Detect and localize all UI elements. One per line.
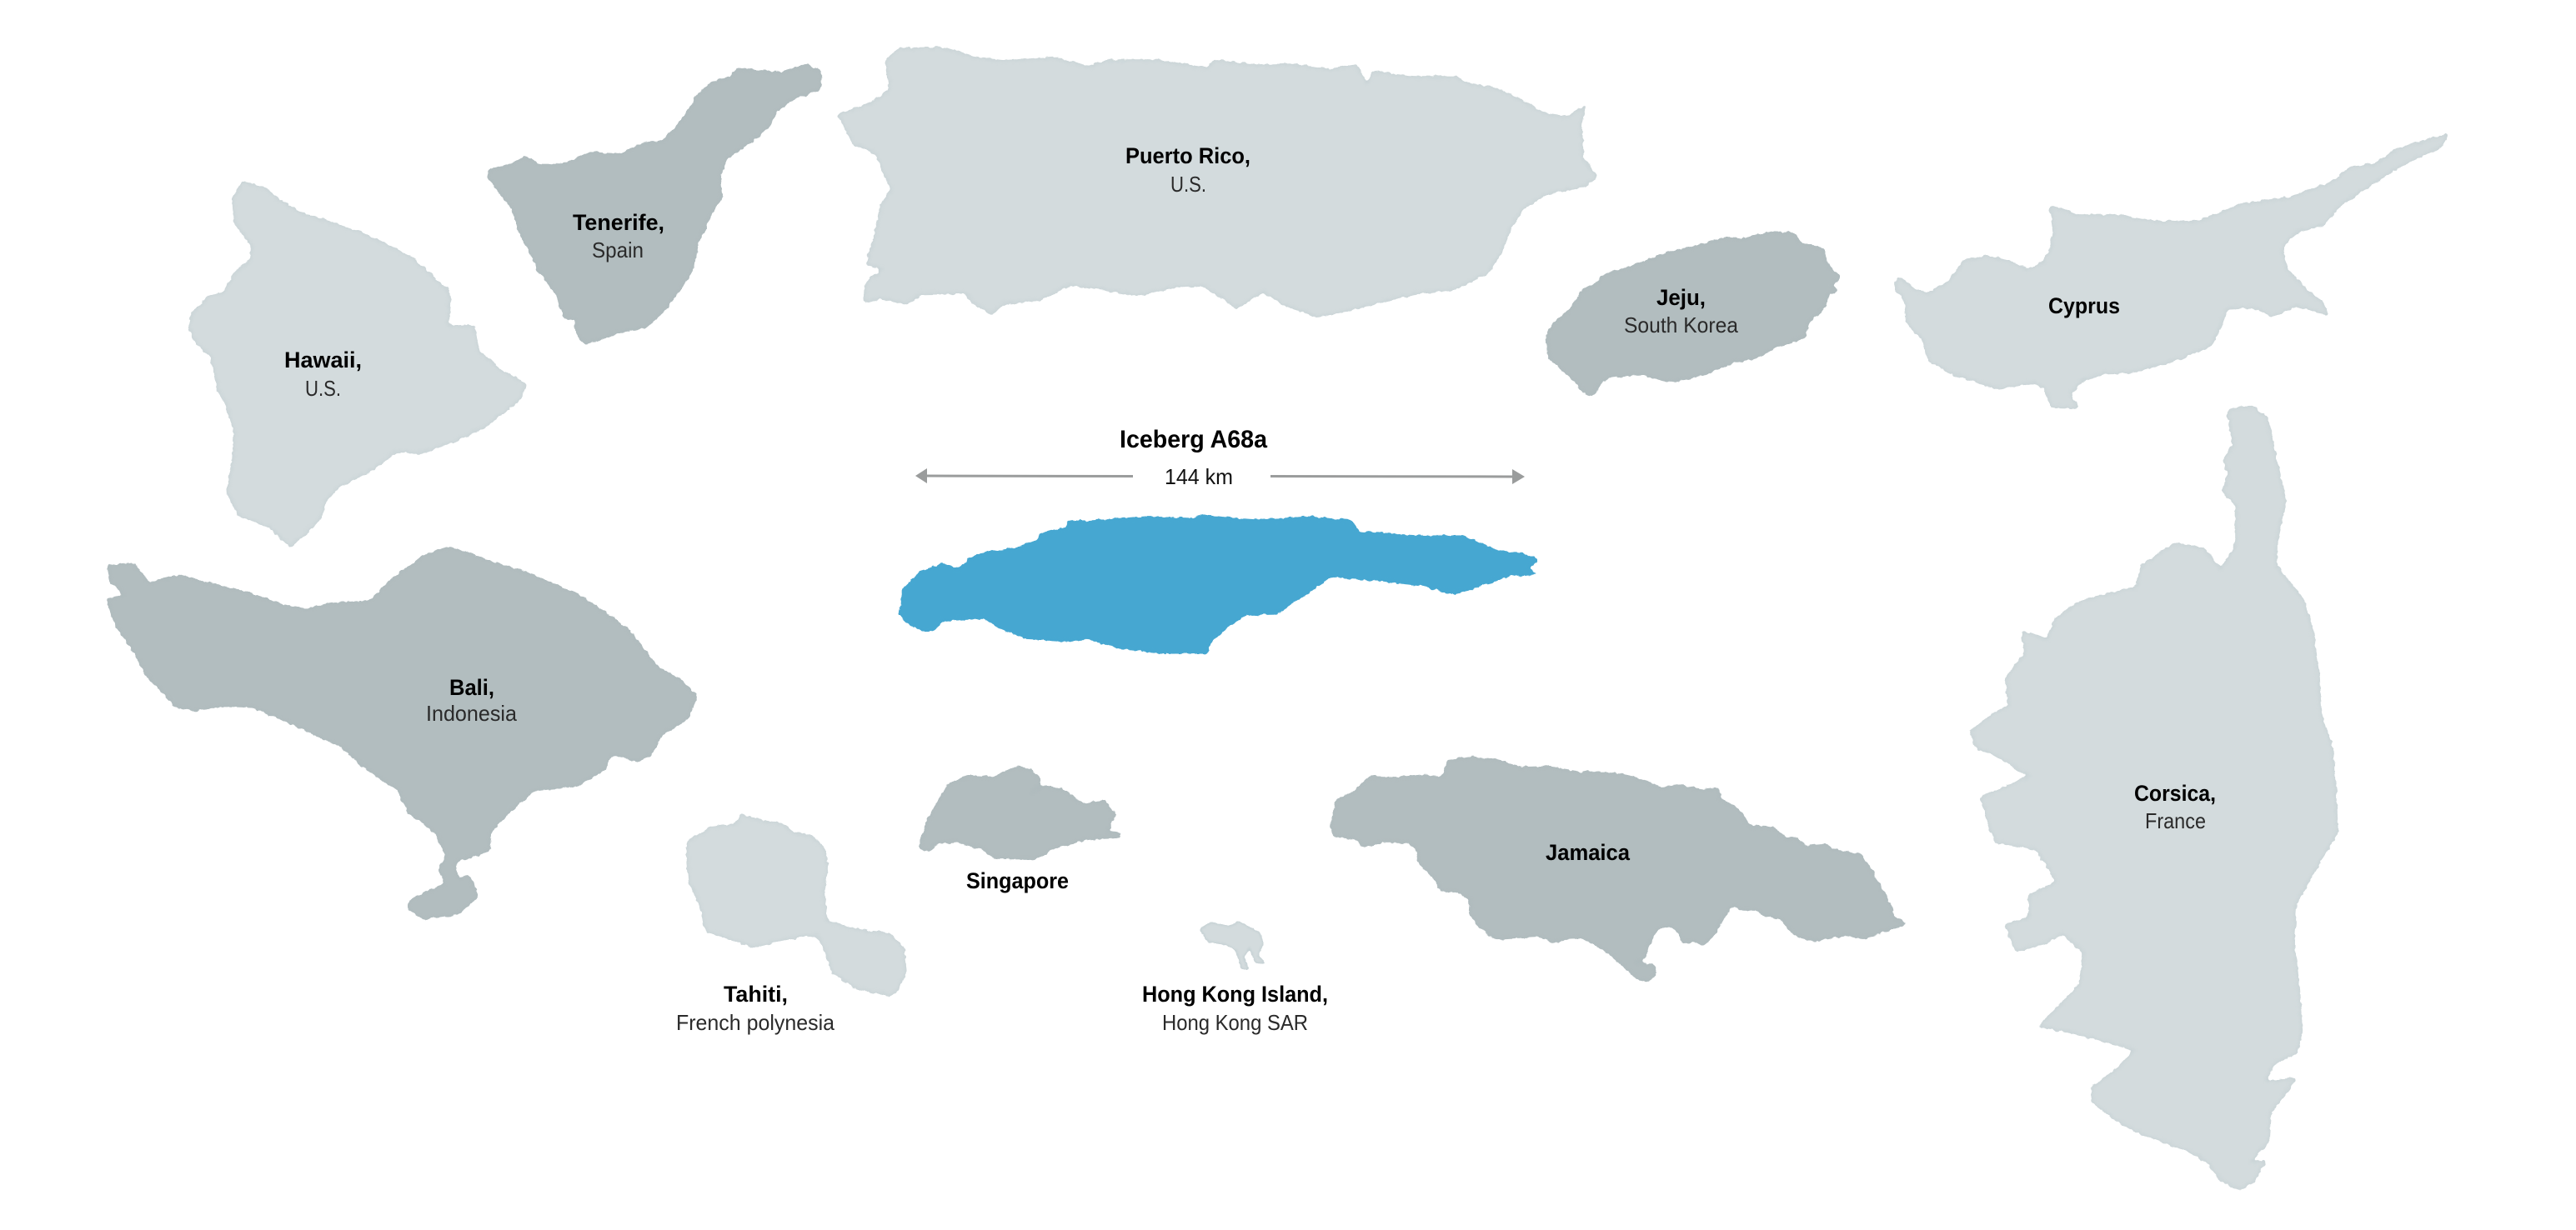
label: Singapore: Singapore — [966, 868, 1069, 893]
shape: Cyprus — [1895, 134, 2448, 408]
label: Tahiti: French polynesia — [676, 1010, 835, 1035]
island: Singapore — [919, 767, 1120, 893]
shape: Hawaii — [188, 182, 526, 547]
scale label: 144 km: 144 km — [1165, 464, 1233, 489]
shape: Tahiti — [686, 814, 906, 996]
label: Hawaii: U.S. — [305, 376, 341, 401]
shape: Bali — [107, 547, 697, 919]
shape: Tenerife — [487, 64, 822, 344]
label: Hawaii: Hawaii, — [284, 348, 362, 372]
label: Corsica — [2134, 781, 2216, 833]
island: Tenerife — [487, 64, 822, 344]
shape: Singapore — [919, 767, 1120, 859]
label: Bali: Bali, — [449, 675, 494, 700]
island: Jamaica — [1331, 757, 1907, 981]
island: Tahiti — [676, 814, 906, 1035]
label: Tenerife: Spain — [592, 238, 644, 262]
label: Bali: Indonesia — [426, 701, 518, 726]
shape: Hong Kong Island — [1200, 922, 1265, 969]
label: Jamaica: Jamaica — [1546, 840, 1631, 865]
heading: Iceberg A68a: Iceberg A68a — [1120, 426, 1267, 453]
iceberg A68a — [899, 426, 1540, 653]
label: Jeju: Jeju, — [1656, 285, 1706, 310]
label: Tenerife: Tenerife, — [573, 210, 664, 235]
label: Jeju: South Korea — [1624, 312, 1738, 338]
label: Puerto Rico: U.S. — [1170, 172, 1206, 197]
island: Cyprus — [1895, 134, 2448, 408]
label: Corsica: France — [2145, 808, 2206, 833]
arrow: right — [1270, 469, 1525, 484]
label: Hawaii — [284, 348, 362, 401]
island: Puerto Rico — [838, 48, 1597, 317]
label: Hong Kong Island: Hong Kong Island, — [1142, 982, 1328, 1007]
shape: Jamaica — [1331, 757, 1907, 981]
label: Puerto Rico: Puerto Rico, — [1125, 143, 1250, 168]
label: Cyprus: Cyprus — [2048, 293, 2120, 318]
shape: Puerto Rico — [838, 48, 1597, 317]
label: Puerto Rico — [1125, 143, 1250, 197]
label: Tahiti: Tahiti, — [724, 982, 788, 1007]
shape: Corsica — [1970, 407, 2338, 1190]
island: Hawaii — [188, 182, 526, 547]
label: Corsica: Corsica, — [2134, 781, 2216, 806]
shape: iceberg — [899, 515, 1540, 653]
label: Tahiti — [676, 982, 835, 1035]
island: Hong Kong Island — [1142, 922, 1328, 1035]
arrow: left — [915, 468, 1133, 483]
label: Jeju — [1624, 285, 1738, 338]
label: Hong Kong Island — [1142, 982, 1328, 1035]
island: Jeju — [1546, 232, 1841, 395]
label: Bali — [426, 675, 518, 726]
label: Hong Kong Island: Hong Kong SAR — [1162, 1010, 1308, 1035]
island: Corsica — [1970, 407, 2338, 1190]
island: Bali — [107, 547, 697, 919]
label: Tenerife — [573, 210, 664, 262]
shape: Jeju — [1546, 232, 1841, 395]
